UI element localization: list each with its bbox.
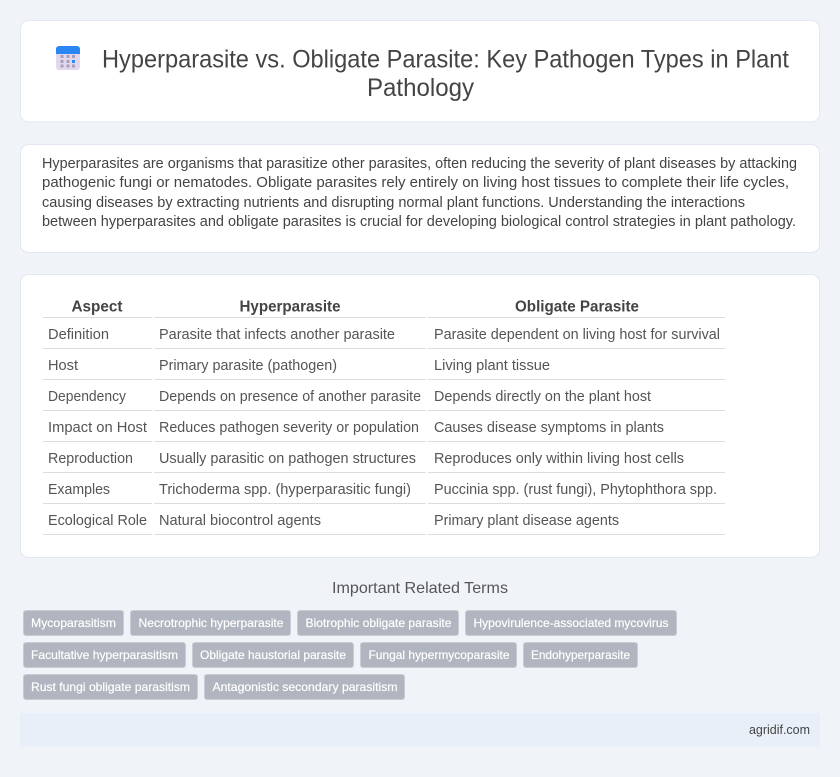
table header: Hyperparasite <box>240 298 341 316</box>
table header <box>72 298 639 316</box>
panel: title card <box>20 20 820 122</box>
row: dependency: Depends directly on the plant host <box>434 389 651 405</box>
panel: comparison table <box>20 274 820 558</box>
row: ecological role <box>48 513 619 529</box>
row: definition: Parasite dependent on living host for survival <box>434 327 720 343</box>
text block: introduction: pathogenic fungi or nematodes. Obligate parasites rely entirely on living host tissues to complete their life cycles, <box>42 175 789 191</box>
row: dependency: Depends on presence of another parasite <box>159 389 421 405</box>
text block: introduction: Hyperparasites are organisms that parasitize other parasites, often reducing the severity of plant diseases by attacking <box>42 156 797 172</box>
table header: Obligate Parasite <box>515 298 639 316</box>
footer: agridif.com <box>749 722 810 737</box>
row: impact on host: Impact on Host <box>48 420 147 436</box>
row: reproduction: Reproduces only within living host cells <box>434 451 684 467</box>
row: examples <box>48 482 717 498</box>
row: impact on host: Causes disease symptoms in plants <box>434 420 664 436</box>
row: host: Primary parasite (pathogen) <box>159 358 337 374</box>
icon: calendar <box>56 46 80 70</box>
tag: Obligate haustorial parasite <box>200 648 346 662</box>
table header: Aspect <box>72 298 122 316</box>
title: Hyperparasite vs. Obligate Parasite: Key Pathogen Types in Plant <box>102 46 789 74</box>
tag list <box>24 610 676 700</box>
tag <box>204 674 404 700</box>
footer <box>20 713 820 747</box>
row: ecological role: Ecological Role <box>48 513 147 529</box>
tag: Rust fungi obligate parasitism <box>31 680 190 694</box>
tag <box>24 642 186 668</box>
row: impact on host: Reduces pathogen severity or population <box>159 420 419 436</box>
title: Pathology <box>367 74 474 102</box>
tag: Fungal hypermycoparasite <box>368 648 510 662</box>
tag <box>24 610 124 636</box>
text block: introduction: between hyperparasites and obligate parasites is crucial for developing biological control strategies in plant pathology. <box>42 214 796 230</box>
tag: Biotrophic obligate parasite <box>306 616 452 630</box>
tag: Antagonistic secondary parasitism <box>212 680 398 694</box>
tag <box>192 642 354 668</box>
row: host: Host <box>48 358 78 374</box>
row: reproduction: Reproduction <box>48 451 133 467</box>
tag <box>524 642 638 668</box>
row: examples: Puccinia spp. (rust fungi), Phytophthora spp. <box>434 482 717 498</box>
row: examples: Examples <box>48 482 110 498</box>
row: dependency <box>48 389 651 405</box>
title <box>102 46 789 102</box>
text block: introduction <box>42 156 797 230</box>
tag <box>466 610 676 636</box>
row: impact on host <box>48 420 664 436</box>
row: examples: Trichoderma spp. (hyperparasitic fungi) <box>159 482 411 498</box>
row: definition <box>48 327 720 343</box>
row: host <box>48 358 550 374</box>
tag <box>24 674 198 700</box>
tag: Facultative hyperparasitism <box>31 648 178 662</box>
tag: Mycoparasitism <box>31 616 116 630</box>
tag: Necrotrophic hyperparasite <box>138 616 284 630</box>
row: reproduction <box>48 451 684 467</box>
tag: Hypovirulence-associated mycovirus <box>474 616 668 630</box>
tag <box>298 610 458 636</box>
row: dependency: Dependency <box>48 389 127 405</box>
tag <box>130 610 290 636</box>
row: definition: Definition <box>48 327 109 343</box>
row: definition: Parasite that infects another parasite <box>159 327 395 343</box>
panel: introduction <box>20 144 820 252</box>
row: ecological role: Primary plant disease agents <box>434 513 619 529</box>
row: host: Living plant tissue <box>434 358 550 374</box>
heading: important related terms: Important Related Terms <box>332 580 508 597</box>
tag <box>360 642 516 668</box>
row: reproduction: Usually parasitic on pathogen structures <box>159 451 416 467</box>
row: ecological role: Natural biocontrol agents <box>159 513 321 529</box>
text block: introduction: causing diseases by extracting nutrients and disrupting normal plant functions. Understanding the interactions <box>42 195 745 211</box>
tag: Endohyperparasite <box>531 648 630 662</box>
